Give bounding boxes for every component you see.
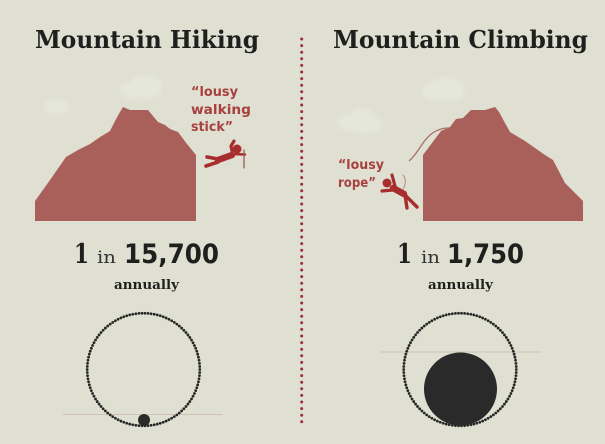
callout: lousy walking stick: stick” bbox=[191, 119, 233, 135]
icon: clouds bbox=[44, 76, 162, 114]
statistic: 1 in 15,700: 1 bbox=[74, 239, 89, 270]
icon: frayed rope bbox=[409, 128, 449, 161]
statistic: 1 in 15,700 bbox=[74, 239, 219, 270]
callout: lousy walking stick: walking bbox=[191, 102, 251, 118]
label: annually: annually bbox=[114, 278, 179, 293]
panel: mountain hiking bbox=[35, 25, 259, 426]
chart: risk circle bbox=[380, 313, 541, 426]
callout: lousy rope: rope” bbox=[338, 175, 376, 191]
icon: falling hiker with stick bbox=[206, 141, 245, 168]
statistic: 1 in 1,750: 1 bbox=[397, 239, 412, 270]
statistic: 1 in 15,700: in bbox=[97, 248, 116, 268]
mountain bbox=[423, 107, 583, 221]
callout: lousy walking stick: “lousy bbox=[191, 84, 238, 100]
statistic: 1 in 1,750: in bbox=[421, 248, 440, 268]
divider: red dotted line bbox=[300, 39, 303, 425]
icon: clouds bbox=[337, 78, 464, 133]
callout: lousy rope: “lousy bbox=[338, 157, 384, 173]
heading: Mountain Climbing: Mountain Climbing bbox=[333, 25, 588, 54]
statistic: 1 in 15,700: 15,700 bbox=[124, 239, 219, 270]
mountain bbox=[35, 107, 196, 221]
statistic: 1 in 1,750: 1,750 bbox=[447, 239, 524, 270]
label: annually: annually bbox=[428, 278, 493, 293]
heading: Mountain Hiking: Mountain Hiking bbox=[35, 25, 259, 54]
icon: falling climber bbox=[382, 175, 417, 208]
statistic: 1 in 1,750 bbox=[397, 239, 524, 270]
panel: mountain climbing bbox=[333, 25, 588, 426]
chart: risk circle bbox=[63, 313, 222, 426]
